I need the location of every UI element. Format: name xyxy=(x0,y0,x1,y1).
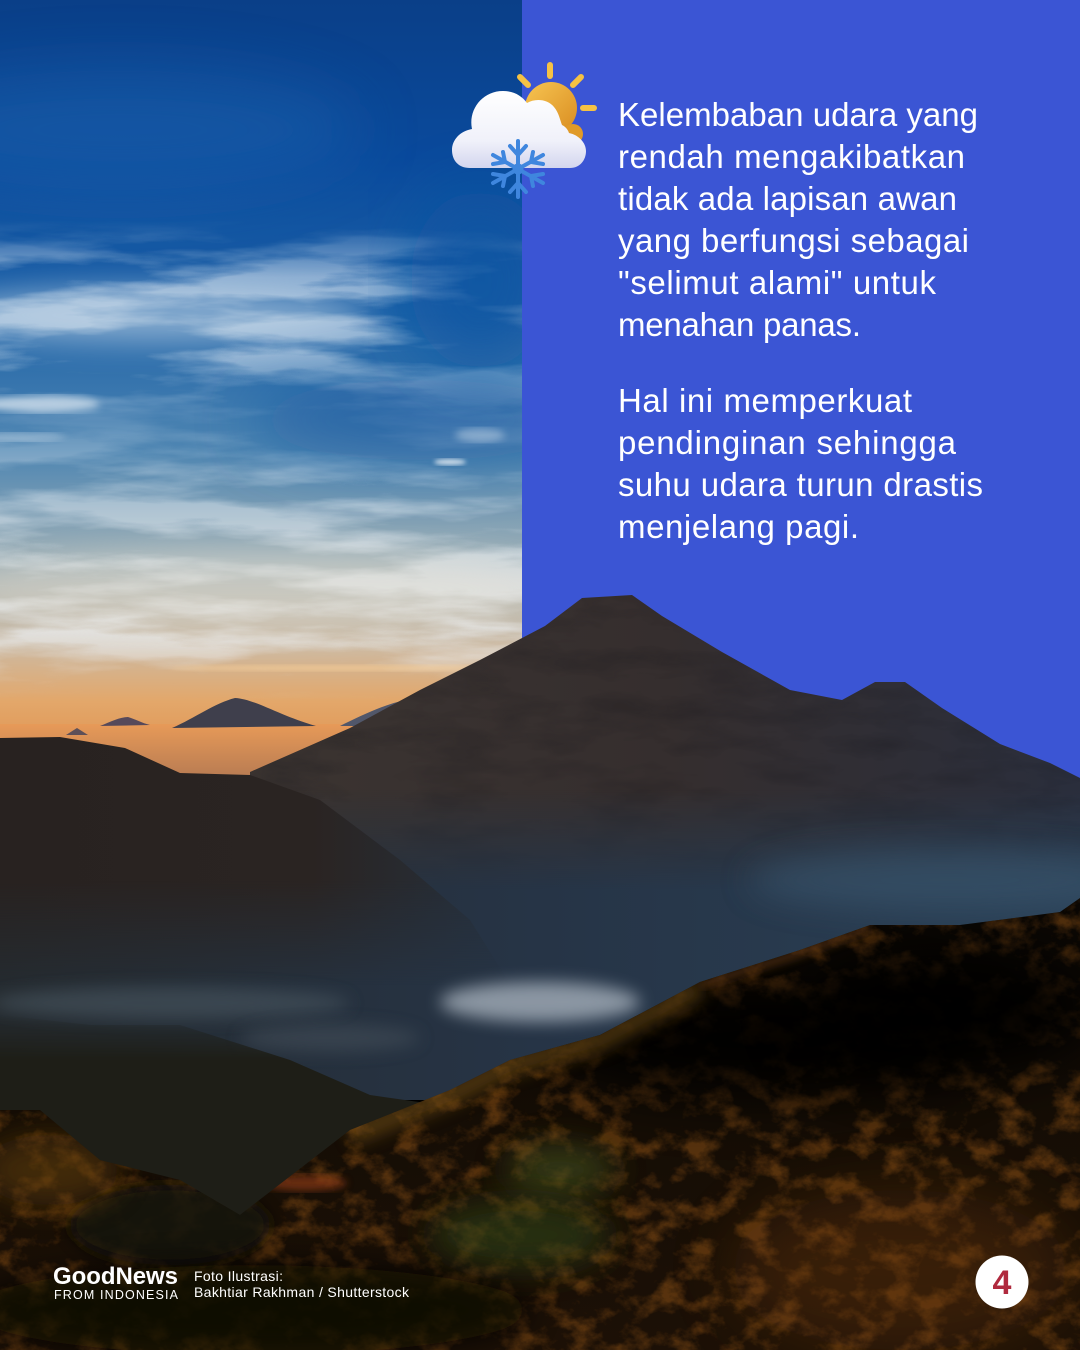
text block: paragraph 2: Hal ini memperkuat xyxy=(618,382,912,419)
text block: paragraph 1: tidak ada lapisan awan xyxy=(618,180,957,217)
valley with mist xyxy=(0,817,1080,1100)
low cloud in valley xyxy=(440,982,640,1022)
text block: paragraph 2: menjelang pagi. xyxy=(618,508,859,545)
icon: sun, cloud and snowflake xyxy=(452,65,594,197)
icon: cloud xyxy=(452,91,586,168)
text block: paragraph 1: Kelembaban udara yang xyxy=(618,96,978,133)
left dark hills xyxy=(0,737,462,954)
page number badge xyxy=(976,1256,1028,1308)
photo background: sky half xyxy=(0,0,522,775)
logo: GoodNews from Indonesia: FROM INDONESIA xyxy=(54,1288,179,1302)
text block: paragraph 1 xyxy=(618,96,978,343)
photo credit: Foto Ilustrasi: xyxy=(194,1268,283,1284)
icon: snowflake xyxy=(493,141,543,197)
photo credit xyxy=(194,1268,410,1300)
logo: GoodNews from Indonesia xyxy=(53,1263,179,1302)
logo: GoodNews from Indonesia: GoodNews xyxy=(53,1263,178,1290)
text block: paragraph 2 xyxy=(618,382,983,545)
text block: paragraph 2: pendinginan sehingga xyxy=(618,424,957,461)
blue panel xyxy=(522,0,1080,800)
foreground hills xyxy=(0,890,1080,1350)
photo credit: Bakhtiar Rakhman / Shutterstock xyxy=(194,1284,410,1300)
page number badge: 4 xyxy=(993,1264,1012,1302)
icon: sun with rays xyxy=(520,65,594,144)
text block: paragraph 1: yang berfungsi sebagai xyxy=(618,222,969,259)
left mid slope xyxy=(0,1025,420,1215)
text block: paragraph 2: suhu udara turun drastis xyxy=(618,466,983,503)
main volcano xyxy=(250,590,1080,900)
distant volcanoes xyxy=(66,698,406,735)
text block: paragraph 1: rendah mengakibatkan xyxy=(618,138,965,175)
text block: paragraph 1: menahan panas. xyxy=(618,306,861,343)
text block: paragraph 1: "selimut alami" untuk xyxy=(618,264,936,301)
